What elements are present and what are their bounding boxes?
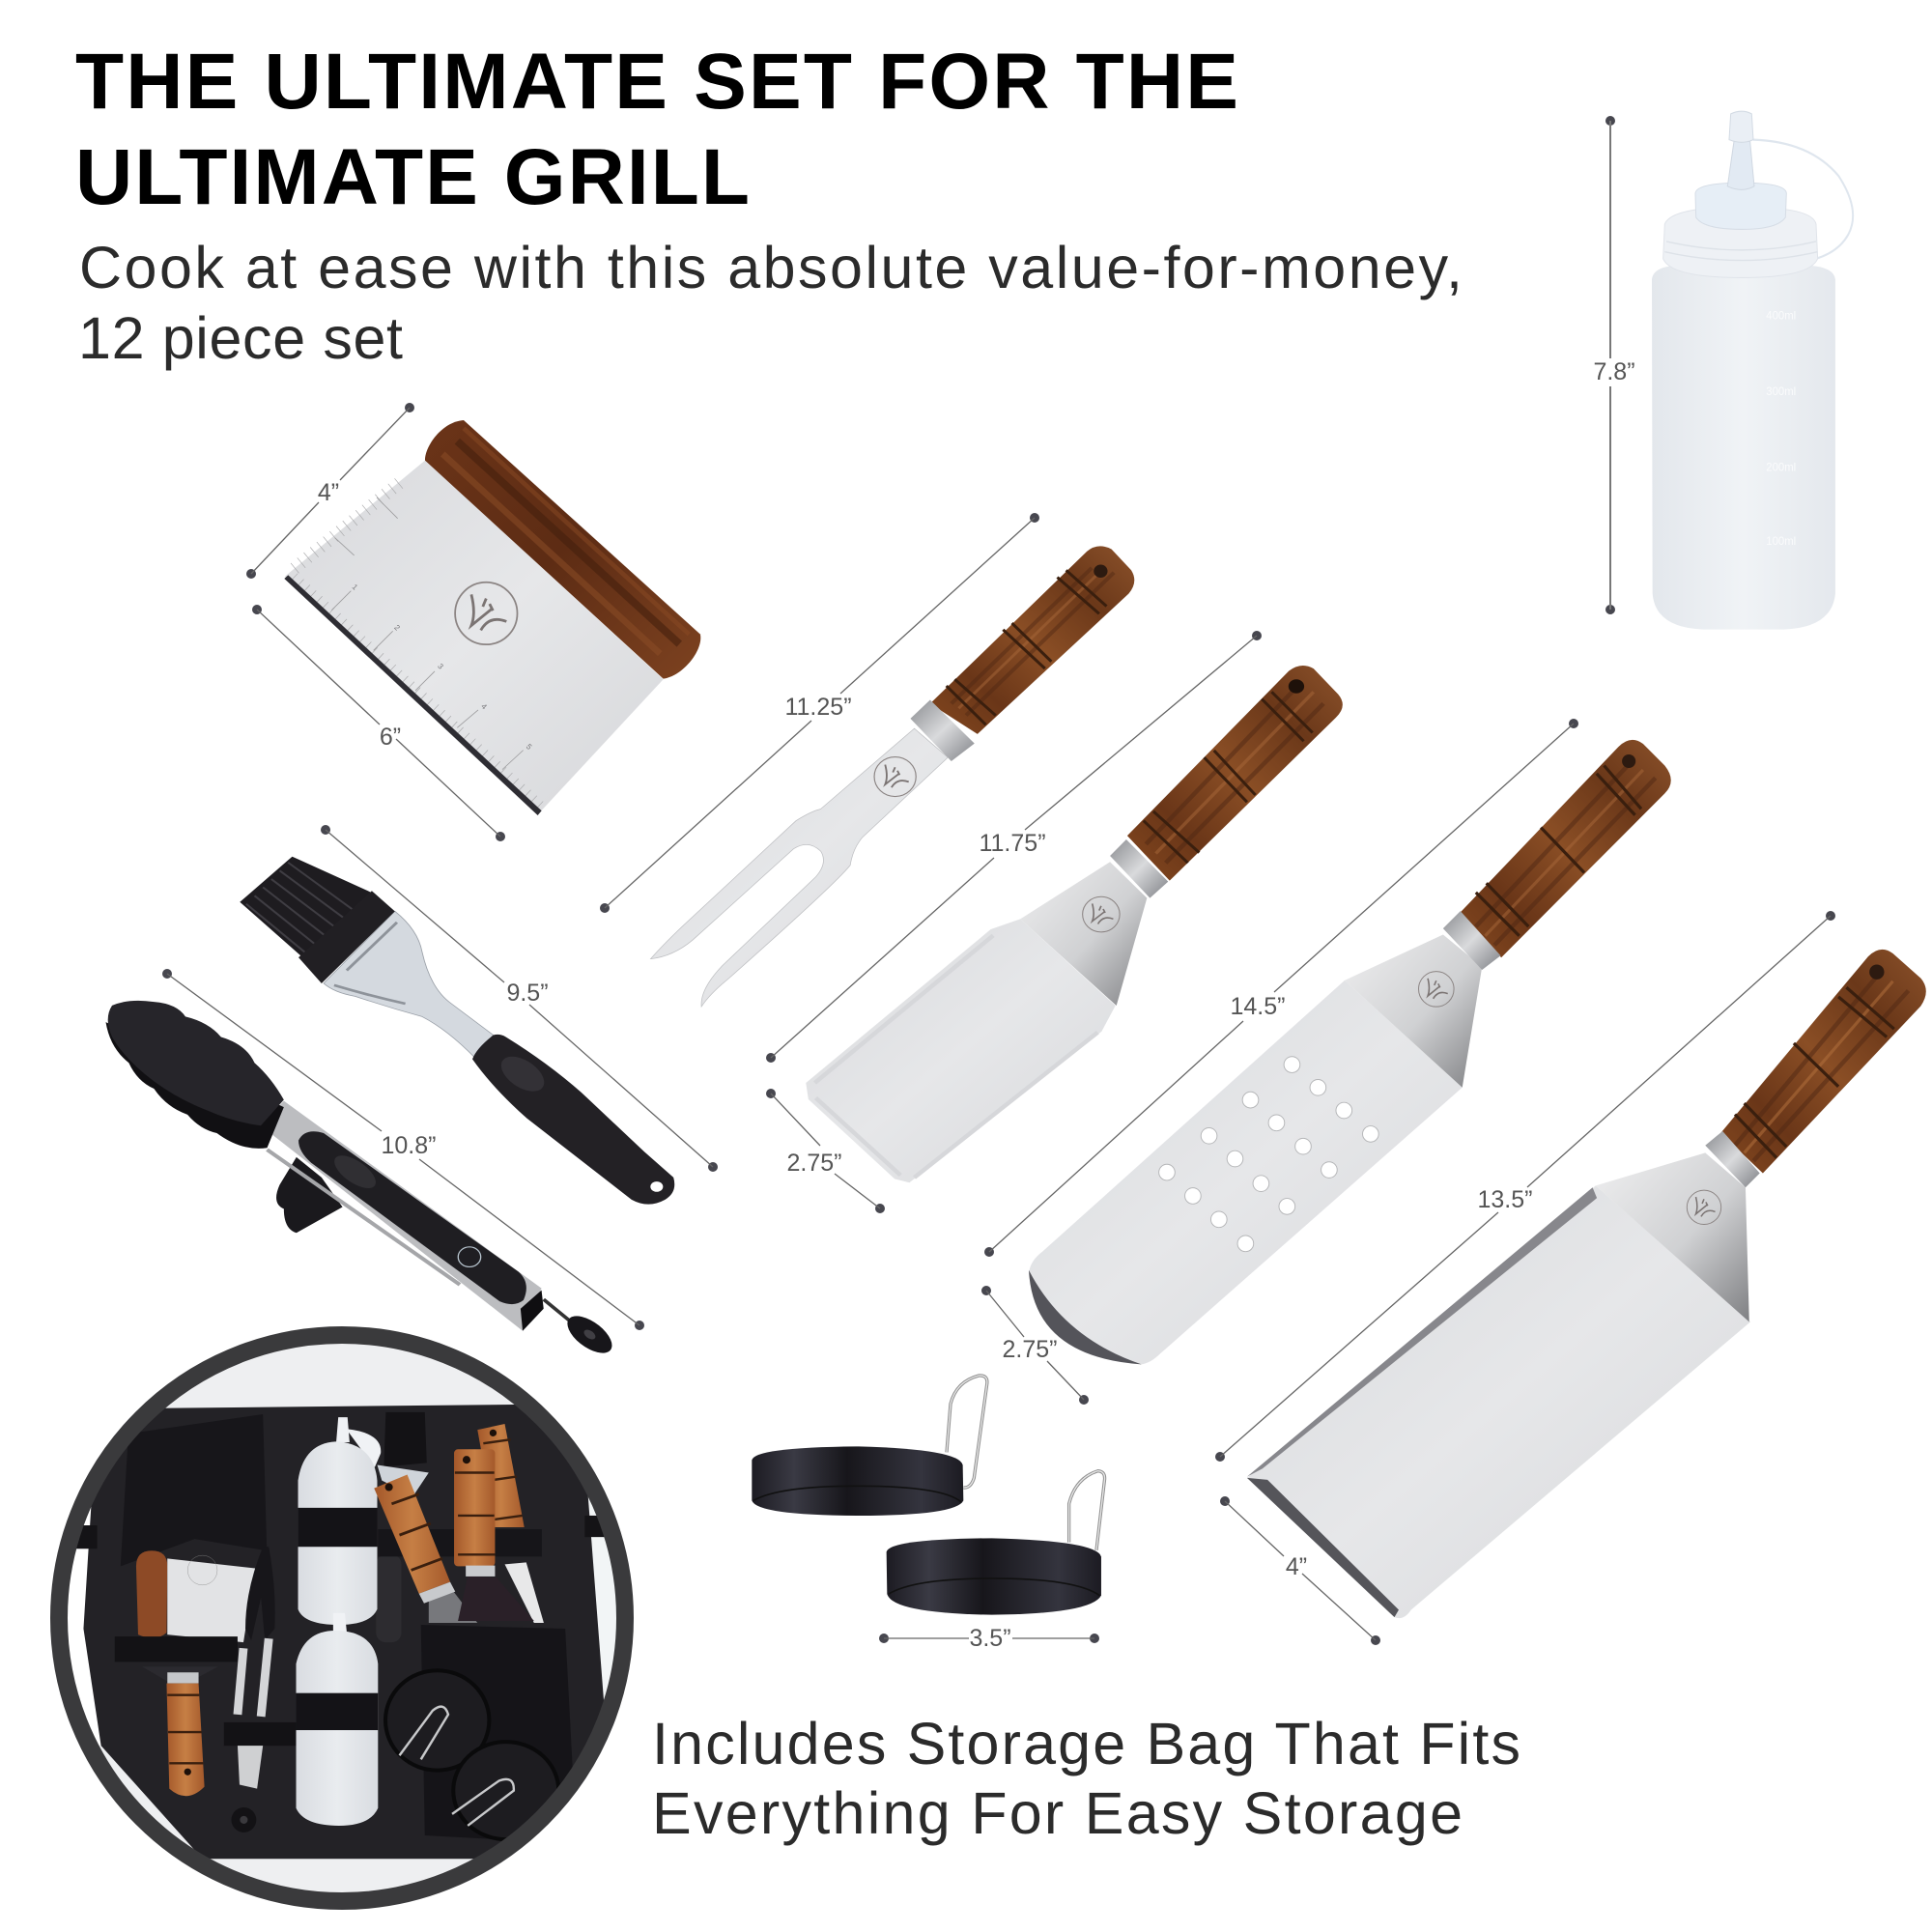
- title: [75, 38, 1238, 221]
- dimension: scraper 6 in: [252, 605, 505, 841]
- egg rings: [752, 1376, 1105, 1615]
- dimension: slotted width 2.75 in: [981, 1286, 1089, 1405]
- dimension: egg ring 3.5 in: 3.5”: [969, 1625, 1011, 1652]
- dimension: fork 11.25 in: [600, 513, 1039, 913]
- squeeze bottle: 400ml: [1766, 309, 1796, 322]
- carving fork: [651, 546, 1134, 1007]
- bench scraper: 3: [436, 662, 445, 671]
- bench scraper: 2: [392, 623, 402, 633]
- storage bag photo: [76, 1344, 616, 1892]
- dimension: scraper 4 in: 4”: [318, 479, 339, 506]
- tongs: [106, 1001, 619, 1360]
- dimension: slotted spatula 14.5 in: 14.5”: [1231, 993, 1285, 1020]
- dimension: tongs 10.8 in: 10.8”: [382, 1132, 436, 1159]
- dimension: spatula 13.5 in: [1215, 911, 1835, 1462]
- bench scraper: 5: [525, 742, 534, 752]
- dimension: brush 9.5 in: [321, 825, 718, 1172]
- subtitle: 12 piece set: [78, 305, 403, 371]
- dimension: scraper 4 in: [246, 403, 414, 579]
- dimension: brush 9.5 in: 9.5”: [506, 980, 549, 1007]
- bench scraper: 4: [479, 702, 489, 712]
- dimension: spatula 13.5 in: 13.5”: [1478, 1186, 1532, 1213]
- title: THE ULTIMATE SET FOR THE: [75, 38, 1238, 126]
- subtitle: [78, 235, 1463, 371]
- dimension: spatula width 2.75 in: [766, 1089, 885, 1213]
- dimension: spatula 11.75 in: 11.75”: [979, 830, 1046, 857]
- dimension: spatula width 2.75 in: 2.75”: [787, 1150, 841, 1177]
- storage caption: [652, 1711, 1520, 1846]
- squeeze bottle: [1652, 111, 1853, 630]
- storage caption: Includes Storage Bag That Fits: [652, 1711, 1520, 1776]
- title: ULTIMATE GRILL: [75, 133, 750, 221]
- bench scraper: 1: [351, 582, 360, 592]
- dimension: slotted width 2.75 in: 2.75”: [1003, 1336, 1057, 1363]
- dimension: tongs 10.8 in: [162, 969, 644, 1330]
- squeeze bottle: 300ml: [1766, 384, 1796, 398]
- squeeze bottle: 200ml: [1766, 461, 1796, 473]
- dimension: bottle 7.8 in: [1593, 116, 1635, 614]
- squeeze bottle: 100ml: [1766, 535, 1796, 548]
- wide spatula 13.5: [1247, 950, 1926, 1618]
- spatula 11.75: [806, 666, 1343, 1182]
- dimension: slotted spatula 14.5 in: [984, 719, 1578, 1257]
- bench scraper: [284, 420, 700, 815]
- storage caption: Everything For Easy Storage: [652, 1780, 1463, 1846]
- dimension: spatula width 4 in: [1220, 1496, 1380, 1645]
- dimension: bottle 7.8 in: 7.8”: [1593, 358, 1635, 385]
- photo ring frame: [59, 1335, 625, 1901]
- slotted spatula 14.5: [1029, 740, 1671, 1364]
- basting brush: [240, 857, 674, 1205]
- dimension: scraper 6 in: 6”: [380, 724, 401, 751]
- subtitle: Cook at ease with this absolute value-for-money,: [79, 235, 1463, 300]
- dimension: fork 11.25 in: 11.25”: [784, 694, 852, 721]
- dimension: egg ring 3.5 in: [879, 1625, 1099, 1652]
- dimension: spatula width 4 in: 4”: [1286, 1553, 1307, 1580]
- dimension: spatula 11.75 in: [766, 631, 1262, 1063]
